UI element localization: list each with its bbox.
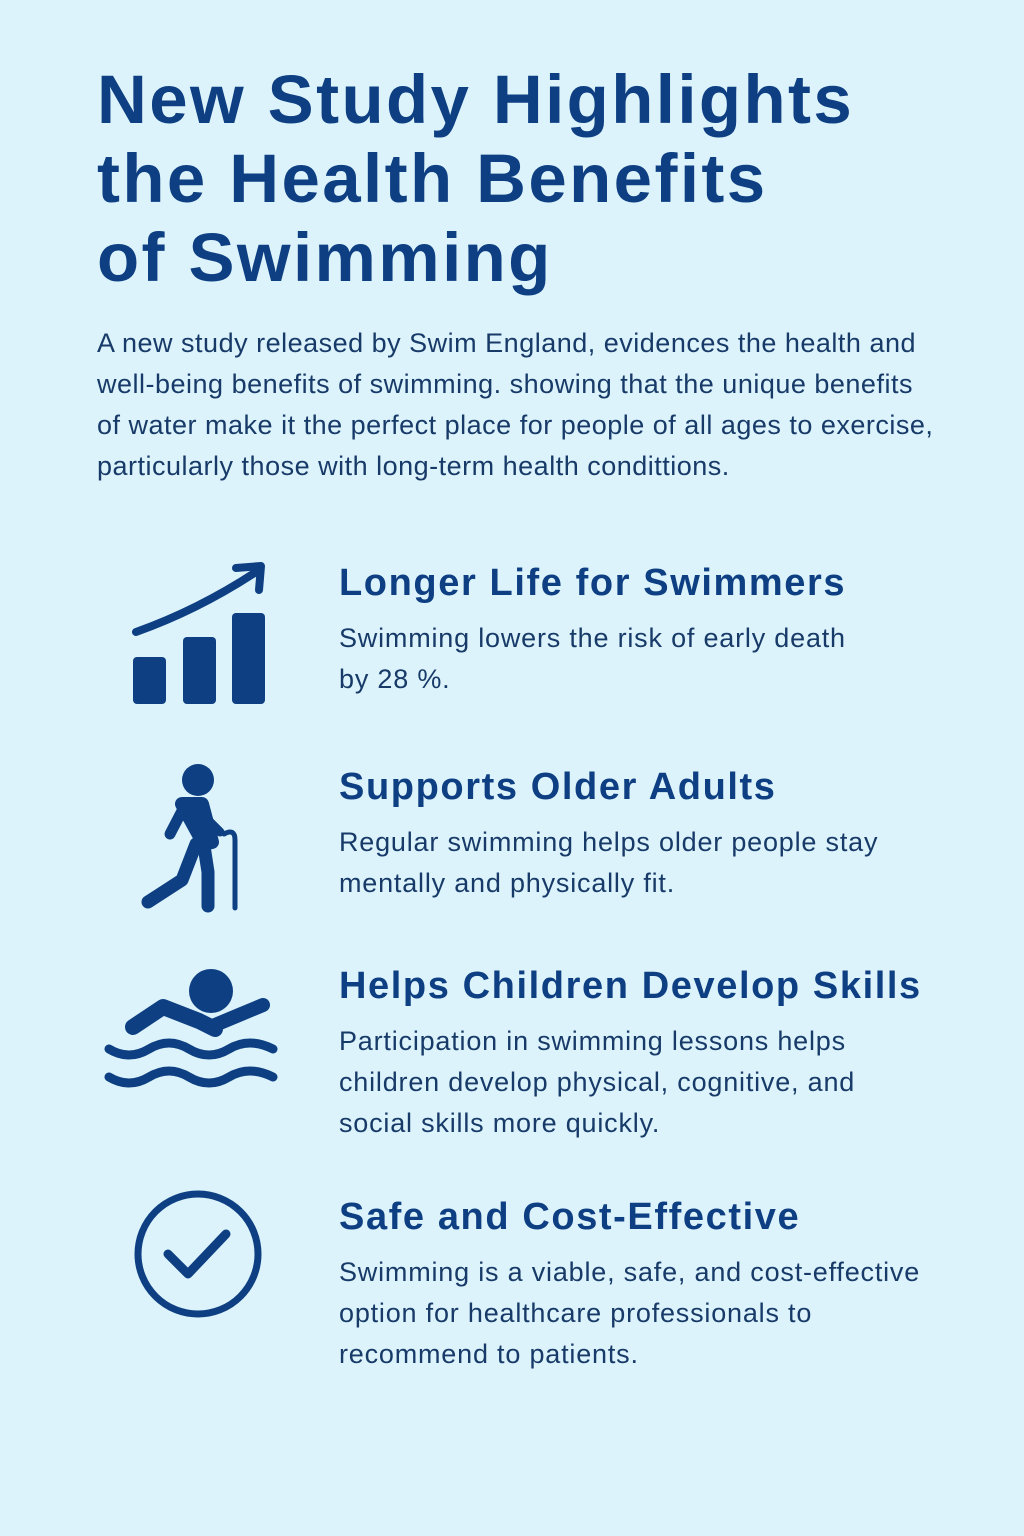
section: longer life: Swimming lowers the risk of early death [339, 623, 846, 653]
section: children: Participation in swimming lessons helps [339, 1026, 846, 1056]
section: safe [339, 1196, 920, 1369]
section: older adults: Supports Older Adults [339, 766, 777, 808]
title: of Swimming [97, 219, 553, 296]
intro text: particularly those with long-term health condittions. [97, 451, 730, 481]
intro text [97, 328, 933, 481]
intro text: well-being benefits of swimming. showing that the unique benefits [97, 369, 913, 399]
section: children: social skills more quickly. [339, 1108, 660, 1138]
section: longer life: by 28 %. [339, 664, 450, 694]
intro text: A new study released by Swim England, evidences the health and [97, 328, 916, 358]
icon: check circle [134, 1190, 262, 1318]
section: older adults: mentally and physically fit. [339, 868, 675, 898]
intro text: of water make it the perfect place for people of all ages to exercise, [97, 410, 933, 440]
title [97, 61, 854, 296]
icon: swimmer [104, 969, 278, 1088]
icon: older adult walking [142, 764, 238, 912]
section: older adults [339, 766, 878, 898]
icon: bar chart [132, 562, 265, 704]
section: older adults: Regular swimming helps older people stay [339, 827, 878, 857]
section: children: children develop physical, cognitive, and [339, 1067, 855, 1097]
section: safe: recommend to patients. [339, 1339, 639, 1369]
title: the Health Benefits [97, 140, 768, 217]
section: safe: option for healthcare professionals to [339, 1298, 812, 1328]
title: New Study Highlights [97, 61, 854, 138]
section: longer life: Longer Life for Swimmers [339, 562, 846, 604]
section: children: Helps Children Develop Skills [339, 965, 922, 1007]
section: longer life [339, 562, 846, 694]
section: safe: Swimming is a viable, safe, and cost-effective [339, 1257, 920, 1287]
section: children [339, 965, 922, 1138]
section: safe: Safe and Cost-Effective [339, 1196, 800, 1238]
